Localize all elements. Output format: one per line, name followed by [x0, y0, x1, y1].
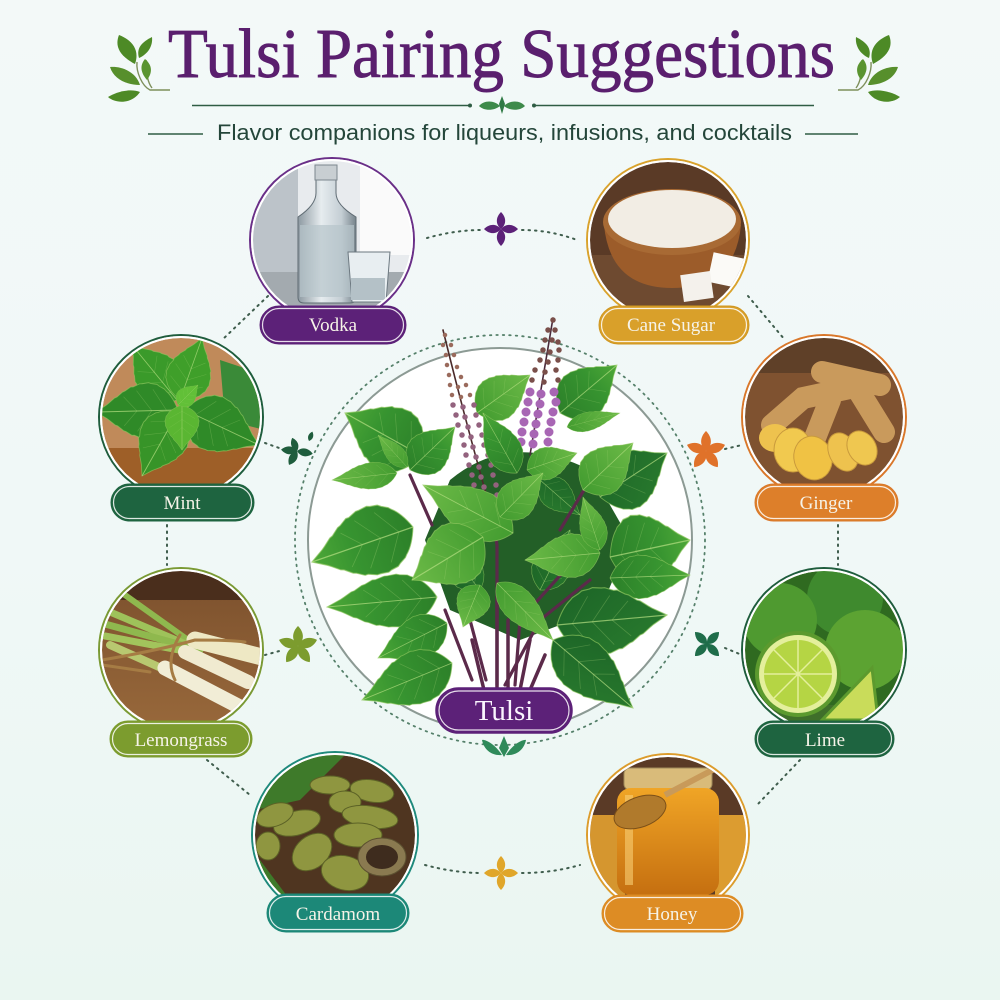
title: Tulsi Pairing Suggestions: [168, 16, 835, 93]
honey ring: [587, 754, 749, 916]
lime ring: [742, 568, 906, 732]
title divider with leaf ornament: [192, 96, 814, 114]
panel: cardamom: [250, 750, 420, 932]
lemongrass ring: [99, 568, 263, 732]
panel: ginger: [740, 335, 910, 521]
mint label: Mint: [164, 493, 201, 514]
tulsi label: [436, 688, 572, 733]
cardamom photo: [255, 755, 415, 894]
icon: left title leaf sprig: [108, 35, 170, 102]
cane sugar ring: [587, 159, 749, 321]
lemongrass label: Lemongrass: [135, 730, 227, 751]
central white disc and rings: [295, 335, 705, 745]
flower spike: left: [443, 330, 498, 515]
lime label: [755, 721, 894, 757]
ginger label: Ginger: [800, 493, 853, 514]
honey label: Honey: [647, 904, 698, 925]
vodka label: Vodka: [309, 315, 358, 336]
honey label: [602, 895, 743, 932]
cardamom label: [267, 894, 409, 932]
icon: leaf ornament under central circle: [482, 736, 526, 757]
panel: central tulsi plant: [295, 318, 705, 757]
icon: green leaf ornament: [692, 629, 722, 659]
lemongrass label: [110, 721, 252, 757]
panel: cane sugar: [585, 159, 750, 344]
flower spike: right: [521, 318, 559, 455]
subtitle: Flavor companions for liqueurs, infusions, and cocktails: [217, 120, 792, 145]
mint label: [111, 484, 254, 521]
mint ring: [99, 335, 263, 499]
icon: orange flower ornament: [685, 431, 727, 470]
cane sugar label: Cane Sugar: [627, 315, 716, 336]
tulsi illustration: [301, 318, 698, 729]
vodka label: [260, 306, 406, 344]
vodka photo: [253, 161, 410, 306]
panel: lime: [740, 560, 910, 757]
vodka ring: [250, 158, 414, 322]
icon: olive leaf ornament: [277, 626, 319, 665]
icon: gold flower ornament: [484, 856, 518, 890]
icon: dark green leaf ornament: [281, 431, 315, 467]
cane sugar label: [599, 306, 749, 344]
tulsi label: Tulsi: [475, 695, 533, 727]
cardamom ring: [252, 752, 418, 918]
icon: right title leaf sprig: [838, 35, 900, 102]
panel: vodka: [250, 158, 415, 344]
mint photo: [102, 338, 260, 484]
panel: mint: [95, 330, 271, 521]
dotted connectors: [167, 230, 838, 873]
cane sugar photo: [590, 162, 746, 306]
lime photo: [745, 571, 903, 720]
lime label: Lime: [805, 730, 845, 751]
ginger photo: [745, 338, 903, 484]
cardamom label: Cardamom: [296, 904, 380, 925]
icon: purple flower ornament: [484, 212, 518, 246]
panel: lemongrass: [95, 565, 270, 757]
panel: honey: [585, 750, 760, 932]
ginger ring: [742, 335, 906, 499]
honey photo: [590, 757, 746, 895]
ginger label: [755, 484, 898, 521]
lemongrass photo: [102, 571, 260, 720]
